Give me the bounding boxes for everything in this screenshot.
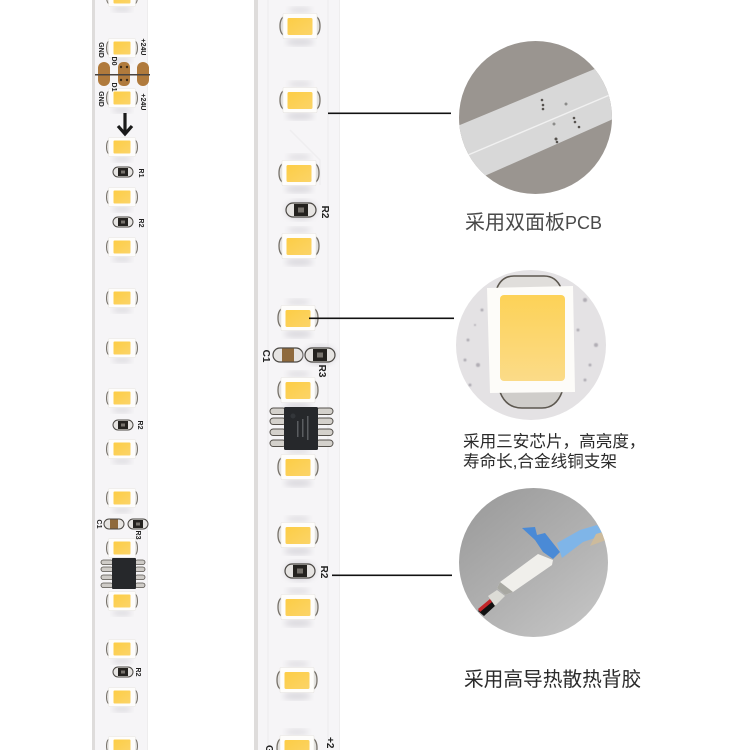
solder pads and cut line	[95, 62, 150, 86]
silkscreen labels narrow strip: +24U	[139, 39, 146, 55]
driver IC narrow strip	[101, 558, 145, 589]
silkscreen labels narrow strip: C1	[95, 520, 102, 529]
caption: LED chip	[463, 432, 646, 471]
silkscreen labels narrow strip: R2	[136, 421, 143, 430]
leader line: PCB	[328, 112, 451, 114]
caption: LED chip: 寿命长,合金线铜支架	[463, 452, 617, 471]
silkscreen labels narrow strip: R2	[137, 219, 144, 228]
silkscreen labels wide strip: R2	[319, 206, 330, 219]
silkscreen labels wide strip	[260, 206, 335, 750]
silkscreen labels wide strip: R3	[316, 365, 327, 378]
silkscreen labels narrow strip: D0	[110, 57, 117, 66]
caption: double-sided PCB: 采用双面板PCB	[465, 211, 602, 234]
silkscreen labels narrow strip: R2	[134, 668, 141, 677]
silkscreen labels wide strip: C1	[260, 350, 271, 363]
detail circle: thermal adhesive	[459, 488, 608, 637]
LED strip: overview (narrow)	[92, 0, 150, 750]
silkscreen labels wide strip: R2	[318, 566, 329, 579]
caption: LED chip: 采用三安芯片，高亮度，	[463, 432, 646, 451]
silkscreen labels narrow strip: R1	[137, 169, 144, 178]
detail circle: LED chip close-up	[456, 270, 606, 420]
LED chips narrow strip	[106, 0, 138, 750]
silkscreen labels wide strip: +2	[324, 737, 335, 749]
silkscreen labels narrow strip: +24U	[139, 94, 146, 110]
resistors and capacitor wide strip	[273, 200, 336, 581]
resistors narrow strip	[104, 167, 148, 677]
caption: thermal adhesive: 采用高导热散热背胶	[464, 669, 641, 691]
leader line: LED chip	[309, 318, 454, 319]
silkscreen labels narrow strip: R3	[134, 531, 141, 540]
silkscreen labels narrow strip: D1	[110, 83, 117, 92]
LED chips wide strip	[277, 7, 320, 750]
leader line: adhesive	[332, 574, 452, 576]
driver IC wide strip	[270, 407, 333, 450]
silkscreen labels narrow strip	[95, 39, 146, 677]
silkscreen labels narrow strip: GND	[97, 91, 104, 107]
detail circle: double-sided PCB	[459, 41, 612, 194]
silkscreen labels narrow strip: GND	[97, 42, 104, 58]
LED strip: close-up (wide)	[254, 0, 340, 750]
arrow: current direction	[118, 113, 132, 134]
